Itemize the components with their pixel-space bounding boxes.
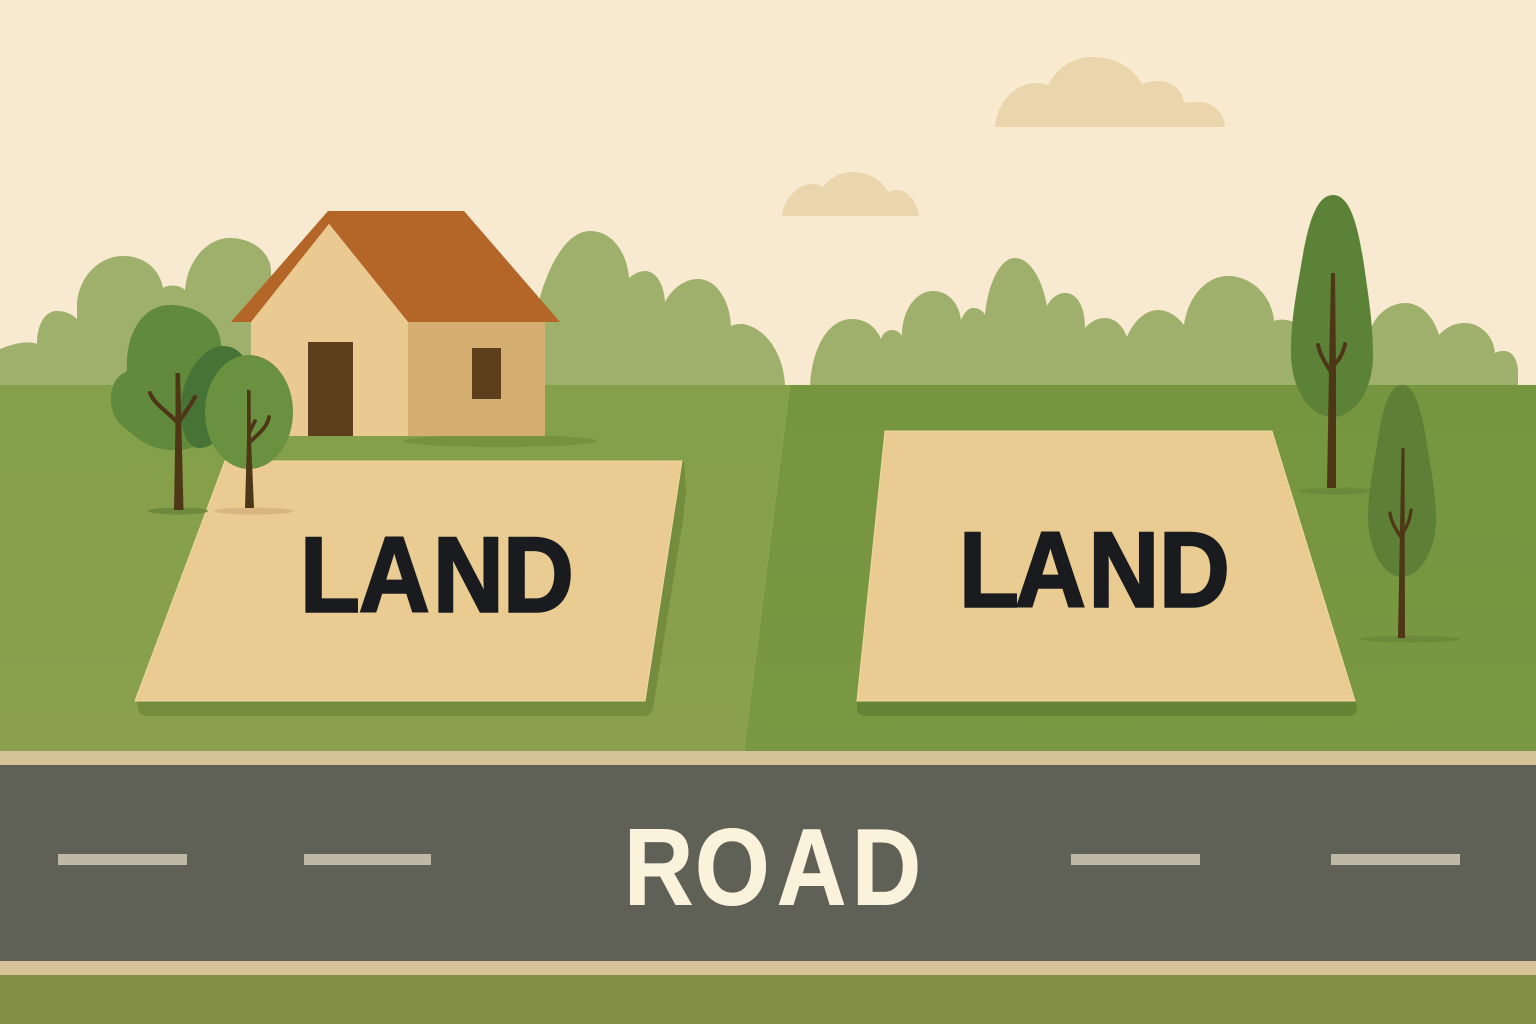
door [308,342,353,436]
road verge: bottom [0,961,1536,975]
tree: left large [111,305,250,514]
roof [231,211,560,322]
road surface [0,765,1536,961]
ground: right field [744,385,1536,751]
road dashes [58,854,1460,865]
cloud: small [782,172,919,216]
label: left land: LAND [300,515,574,634]
sky background [0,0,1536,386]
hills: left background [0,238,272,386]
house [231,211,597,447]
cloud: large [995,57,1225,127]
plot: left land [135,461,686,716]
house ground shadow [403,435,597,447]
window [472,348,501,399]
label: road: ROAD [624,806,921,928]
hills: right background [810,258,1518,386]
side wall [408,322,545,436]
tree: right small [1360,385,1460,642]
ground: foreground grass [0,975,1536,1024]
front wall [251,224,408,436]
hills: behind house right [530,231,785,386]
tree: right tall [1291,195,1373,494]
label: right land: LAND [959,510,1230,629]
plot: right land [857,431,1357,716]
tree: left small [205,355,294,514]
ground: left field [0,385,790,751]
road verge: top [0,751,1536,765]
